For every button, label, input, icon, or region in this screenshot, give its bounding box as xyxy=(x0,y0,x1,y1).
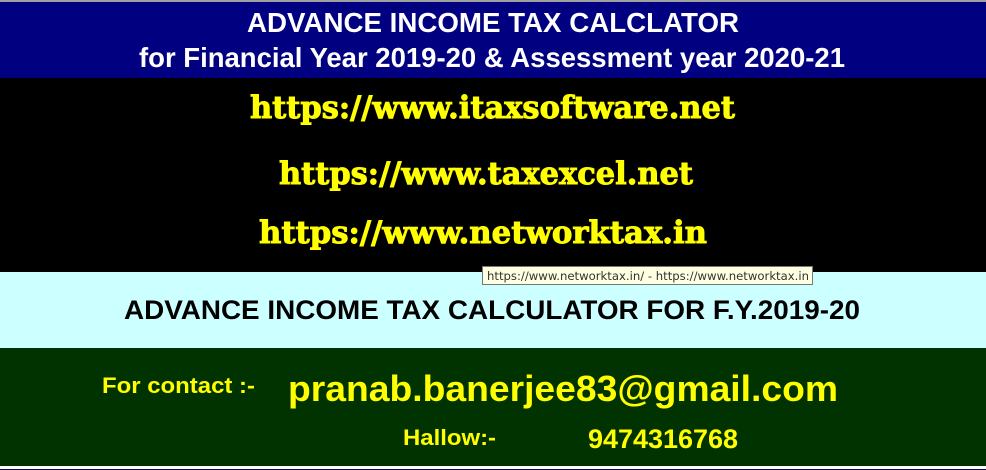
panel: calculator subtitle band xyxy=(0,272,986,348)
label: for contact: For contact :- xyxy=(102,373,255,398)
panel: title banner xyxy=(0,0,986,78)
heading: financial year: for Financial Year 2019-20 & Assessment year 2020-21 xyxy=(139,42,845,73)
label: hallow: Hallow:- xyxy=(403,425,496,450)
link: taxexcel: https://www.taxexcel.net xyxy=(279,156,693,192)
link: networktax: https://www.networktax.in xyxy=(259,215,707,251)
tooltip: networktax link: https://www.networktax.in/ - https://www.networktax.in xyxy=(487,269,809,283)
panel: website links xyxy=(0,78,986,272)
contact email: pranab.banerjee83@gmail.com xyxy=(288,368,838,409)
panel: contact band xyxy=(0,348,986,466)
heading: calculator title: ADVANCE INCOME TAX CALCLATOR xyxy=(247,7,739,38)
heading: calculator for F.Y.: ADVANCE INCOME TAX CALCULATOR FOR F.Y.2019-20 xyxy=(124,295,860,325)
link: itaxsoftware: https://www.itaxsoftware.net xyxy=(250,90,735,126)
contact phone: 9474316768 xyxy=(588,424,738,454)
